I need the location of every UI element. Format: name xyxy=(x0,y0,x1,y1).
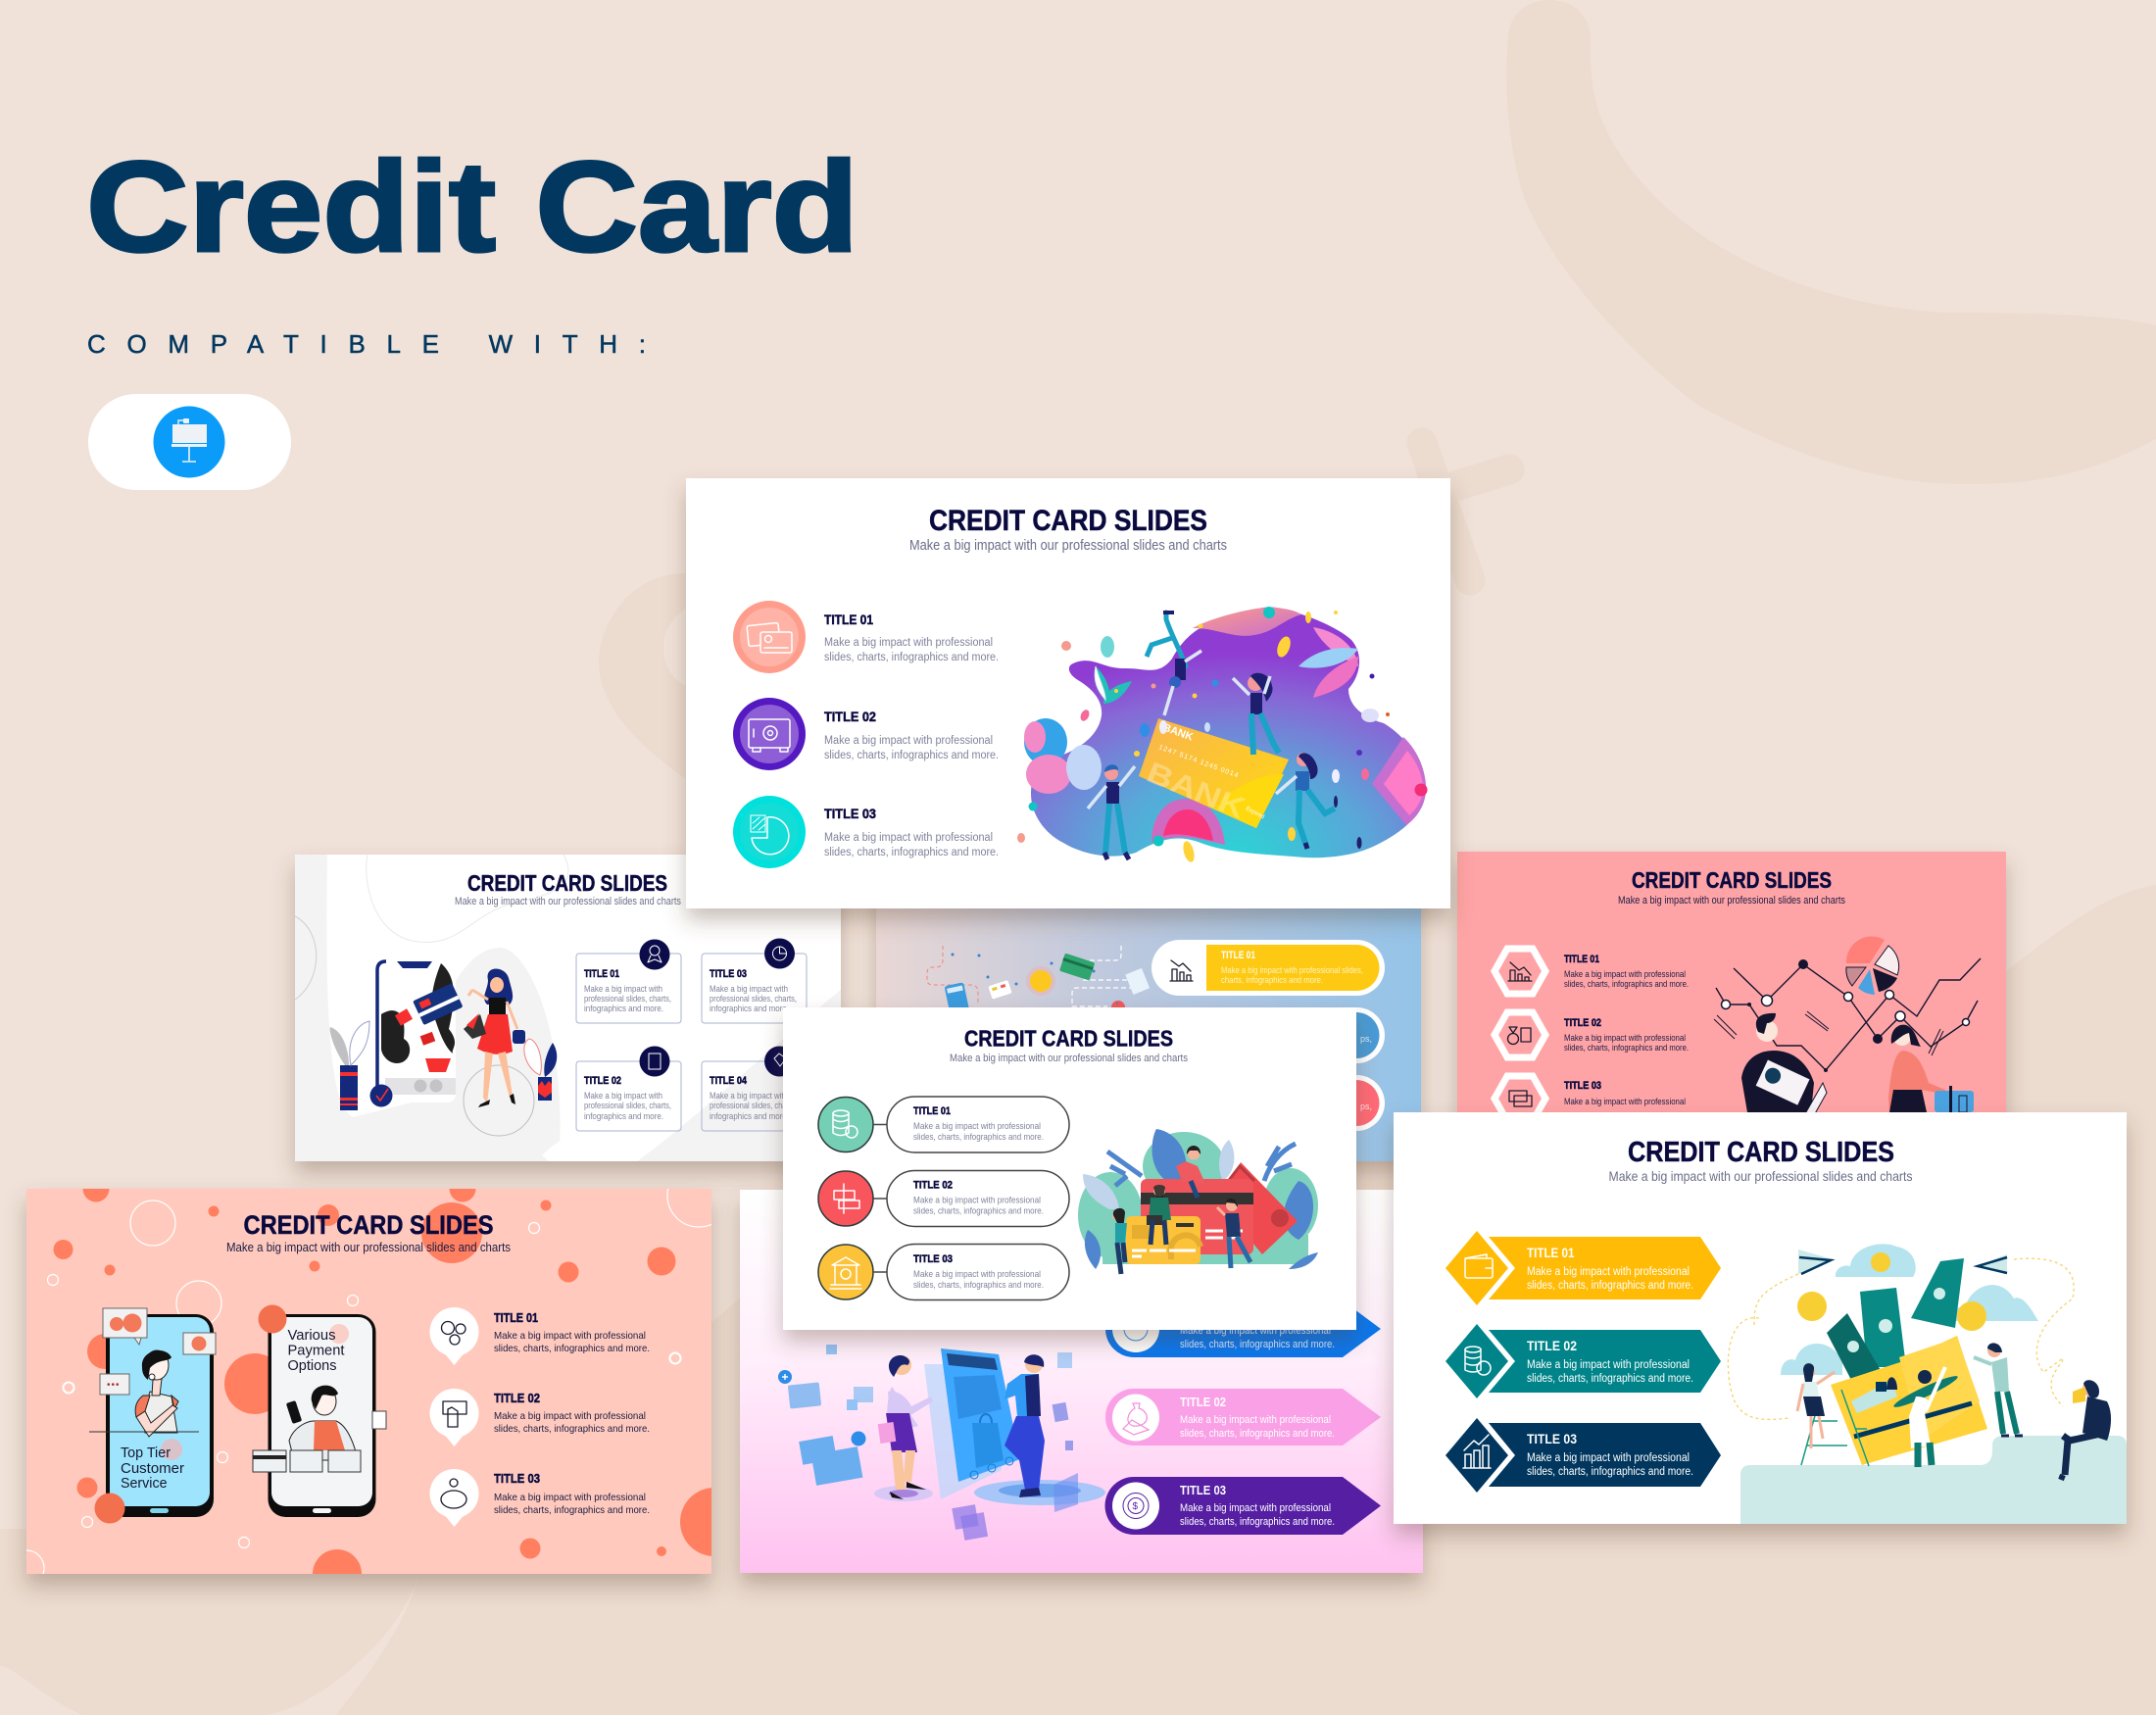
item: title 02: TITLE 02 xyxy=(494,1391,540,1405)
arrow: title 02 pink: Make a big impact with professional xyxy=(1180,1414,1331,1426)
item: title 02: Make a big impact with professional xyxy=(1564,1033,1686,1043)
main title: Credit Card xyxy=(86,134,858,278)
illustration: gradient blob with bank card and people xyxy=(1017,607,1427,863)
item: title 01 xyxy=(1494,949,1689,994)
item: title 02: Make a big impact with professional xyxy=(1527,1359,1690,1371)
illustration: gradient blob with bank card and people: 1247 5174 1245 0014 xyxy=(1157,744,1240,779)
item: title 02: slides, charts, infographics and more. xyxy=(824,750,999,761)
item: title 02: TITLE 02 xyxy=(913,1180,953,1192)
item: title 02: slides, charts, infographics and more. xyxy=(913,1205,1044,1217)
pill: title 03 red xyxy=(1152,1075,1385,1131)
item: title 03 xyxy=(1494,1076,1686,1121)
heading: CREDIT CARD SLIDES xyxy=(1632,867,1832,893)
arrow: title 01 blue: Make a big impact with professional xyxy=(1180,1325,1331,1337)
item: title 01: TITLE 01 xyxy=(494,1310,538,1325)
subheading: Make a big impact with our professional slides and charts xyxy=(950,1053,1188,1064)
item: title 01: TITLE 01 xyxy=(1527,1246,1575,1260)
item: title 01: Make a big impact with professional xyxy=(1527,1266,1690,1278)
phone caption: Options xyxy=(288,1358,337,1374)
panel: blue slide xyxy=(876,855,1421,1161)
item: title 02 xyxy=(1494,1012,1689,1057)
pill: title 01 yellow: TITLE 01 xyxy=(1221,950,1255,961)
phone caption: Various xyxy=(288,1328,335,1344)
item: title 01: slides, charts, infographics and more. xyxy=(824,652,999,663)
illustration: gradient blob with bank card and people: Expired xyxy=(1245,806,1265,820)
phone caption: Customer xyxy=(121,1461,184,1477)
subheading: Make a big impact with our professional slides and charts xyxy=(455,896,681,907)
item: title 03 xyxy=(1446,1418,1721,1493)
card: title 03: infographics and more. xyxy=(710,1004,789,1013)
card: title 03: Make a big impact with xyxy=(710,984,788,994)
item: title 02: slides, charts, infographics and more. xyxy=(494,1423,650,1435)
illustration: customer service phone xyxy=(89,1308,216,1523)
illustration: gradient blob with bank card and people: BANK xyxy=(1161,722,1195,744)
item: title 01: TITLE 01 xyxy=(913,1105,951,1117)
panel: top white slide xyxy=(686,478,1450,908)
heading: CREDIT CARD SLIDES xyxy=(1628,1137,1894,1168)
arrow: title 01 blue xyxy=(1105,1300,1381,1357)
item: title 01: slides, charts, infographics and more. xyxy=(494,1343,650,1354)
item: title 03: slides, charts, infographics and more. xyxy=(494,1504,650,1516)
item: title 01: slides, charts, infographics and more. xyxy=(913,1132,1044,1143)
arrow: title 03 purple: slides, charts, infographics and more. xyxy=(1180,1516,1335,1528)
item: title 03: TITLE 03 xyxy=(913,1253,953,1265)
card: title 01: TITLE 01 xyxy=(584,968,619,980)
item: title 03: TITLE 03 xyxy=(1564,1080,1601,1092)
item: title 02: slides, charts, infographics and more. xyxy=(1527,1373,1693,1385)
item: title 03: TITLE 03 xyxy=(494,1471,540,1486)
heading: CREDIT CARD SLIDES xyxy=(243,1210,494,1240)
item: title 03: Make a big impact with professional xyxy=(1564,1097,1686,1106)
card: title 04 xyxy=(702,1047,807,1131)
item: title 01 xyxy=(1446,1231,1721,1305)
illustration: payment options phone xyxy=(253,1305,386,1517)
panel: coral slide with chart xyxy=(1457,852,2006,1160)
item: title 02 xyxy=(429,1389,650,1446)
item: title 01 xyxy=(733,601,999,673)
card: title 02: Make a big impact with xyxy=(584,1091,662,1101)
pill: title 02 blue: ps, xyxy=(1360,1034,1372,1044)
panel: pink gradient slide xyxy=(740,1190,1423,1573)
card: title 02: TITLE 02 xyxy=(584,1075,621,1087)
pill: title 02 blue xyxy=(1152,1007,1385,1063)
card: title 04: TITLE 04 xyxy=(710,1075,748,1087)
card: title 01: infographics and more. xyxy=(584,1004,663,1013)
item: title 03: Make a big impact with professional xyxy=(824,832,993,844)
illustration: two people at giant phone xyxy=(778,1345,1105,1541)
item: title 02: TITLE 02 xyxy=(1527,1339,1577,1353)
pill: title 03 red: ps, xyxy=(1360,1102,1372,1111)
item: title 01: Make a big impact with professional xyxy=(494,1330,646,1342)
phone caption: Service xyxy=(121,1476,167,1492)
pill: title 01 yellow: charts, infographics and more. xyxy=(1221,975,1323,986)
item: title 01 xyxy=(429,1307,650,1365)
item: title 03 xyxy=(733,796,999,868)
item: title 02: Make a big impact with professional xyxy=(824,735,993,747)
item: title 03: TITLE 03 xyxy=(824,806,876,821)
item: title 02 xyxy=(733,698,999,770)
arrow: title 01 blue: slides, charts, infographics and more. xyxy=(1180,1339,1335,1350)
item: title 03 xyxy=(818,1245,1069,1299)
illustration: wallet, banknotes and people xyxy=(1728,1244,2127,1524)
card: title 01: professional slides, charts, xyxy=(584,994,671,1004)
subtitle: compatible with: COMPATIBLE WITH: xyxy=(87,329,646,359)
item: title 03: slides, charts, infographics and more. xyxy=(913,1280,1044,1291)
arrow: title 03 purple: TITLE 03 xyxy=(1180,1483,1226,1497)
item: title 03 xyxy=(429,1469,650,1527)
pill: keynote badge xyxy=(88,394,291,490)
illustration: line chart, pie and two people xyxy=(1714,936,1981,1117)
phone caption: Payment xyxy=(288,1343,345,1358)
item: title 03: TITLE 03 xyxy=(1527,1432,1577,1446)
subheading: Make a big impact with our professional slides and charts xyxy=(226,1240,511,1254)
heading: CREDIT CARD SLIDES xyxy=(467,870,667,896)
heading: CREDIT CARD SLIDES xyxy=(929,505,1207,537)
item: title 03: slides, charts, infographics and more. xyxy=(1527,1466,1693,1478)
card: title 04: Make a big impact with xyxy=(710,1091,788,1101)
item: title 03: Make a big impact with professional xyxy=(494,1492,646,1503)
phone caption: Top Tier xyxy=(121,1446,171,1461)
item: title 01: slides, charts, infographics and more. xyxy=(1527,1280,1693,1292)
card: title 01: Make a big impact with xyxy=(584,984,662,994)
item: title 01: Make a big impact with professional xyxy=(824,637,993,649)
card: title 04: infographics and more. xyxy=(710,1111,789,1121)
panel: salmon slide with phones xyxy=(9,1164,749,1598)
card: title 04: professional slides, charts, xyxy=(710,1101,797,1110)
item: title 02 xyxy=(1446,1324,1721,1398)
item: title 02: TITLE 02 xyxy=(1564,1017,1601,1029)
subheading: Make a big impact with our professional slides and charts xyxy=(909,538,1227,554)
illustration: phone and shopper xyxy=(330,961,557,1136)
card: title 02 xyxy=(576,1047,681,1131)
card: title 01 xyxy=(576,939,681,1023)
background dots xyxy=(26,1189,711,1574)
illustration: dashed routes and payment items xyxy=(926,946,1150,1017)
item: title 01: Make a big impact with professional xyxy=(913,1121,1041,1132)
subheading: Make a big impact with our professional slides and charts xyxy=(1609,1168,1913,1184)
item: title 01 xyxy=(818,1097,1069,1152)
pill: title 01 yellow xyxy=(1152,940,1385,996)
card: title 03: TITLE 03 xyxy=(710,968,747,980)
item: title 02: Make a big impact with professional xyxy=(494,1410,646,1422)
illustration: stacked cards with people and leaves xyxy=(1078,1129,1318,1274)
arrow: title 02 pink: TITLE 02 xyxy=(1180,1395,1226,1409)
item: title 03: slides, charts, infographics and more. xyxy=(824,847,999,858)
card: title 03: professional slides, charts, xyxy=(710,994,797,1004)
heading: CREDIT CARD SLIDES xyxy=(964,1025,1173,1051)
item: title 01: TITLE 01 xyxy=(824,612,873,627)
item: title 01: slides, charts, infographics and more. xyxy=(1564,979,1689,989)
item: title 01: TITLE 01 xyxy=(1564,954,1599,965)
arrow: title 03 purple: $ xyxy=(1133,1501,1139,1512)
card: title 03 xyxy=(702,939,807,1023)
pill: title 01 yellow: Make a big impact with professional slides, xyxy=(1221,965,1363,976)
item: title 02 xyxy=(818,1170,1069,1227)
arrow: title 02 pink xyxy=(1105,1389,1381,1446)
illustration: customer service phone: ••• xyxy=(107,1380,121,1391)
arrow: title 02 pink: slides, charts, infographics and more. xyxy=(1180,1428,1335,1440)
panel: right white slide with wallet xyxy=(1394,1112,2127,1524)
arrow: title 03 purple xyxy=(1105,1477,1381,1535)
item: title 01: Make a big impact with professional xyxy=(1564,969,1686,979)
item: title 03: Make a big impact with professional xyxy=(913,1269,1041,1280)
card: title 02: professional slides, charts, xyxy=(584,1101,671,1110)
item: title 02: TITLE 02 xyxy=(824,709,876,724)
illustration: gradient blob with bank card and people: BANK xyxy=(1142,757,1250,825)
item: title 02: slides, charts, infographics and more. xyxy=(1564,1043,1689,1053)
panel: grey slide with shopper xyxy=(295,855,841,1161)
item: title 02: Make a big impact with professional xyxy=(913,1196,1041,1205)
panel: center white slide xyxy=(783,1007,1356,1330)
card: title 02: infographics and more. xyxy=(584,1111,663,1121)
arrow: title 03 purple: Make a big impact with professional xyxy=(1180,1502,1331,1514)
subheading: Make a big impact with our professional slides and charts xyxy=(1618,895,1845,906)
item: title 03: Make a big impact with professional xyxy=(1527,1452,1690,1464)
